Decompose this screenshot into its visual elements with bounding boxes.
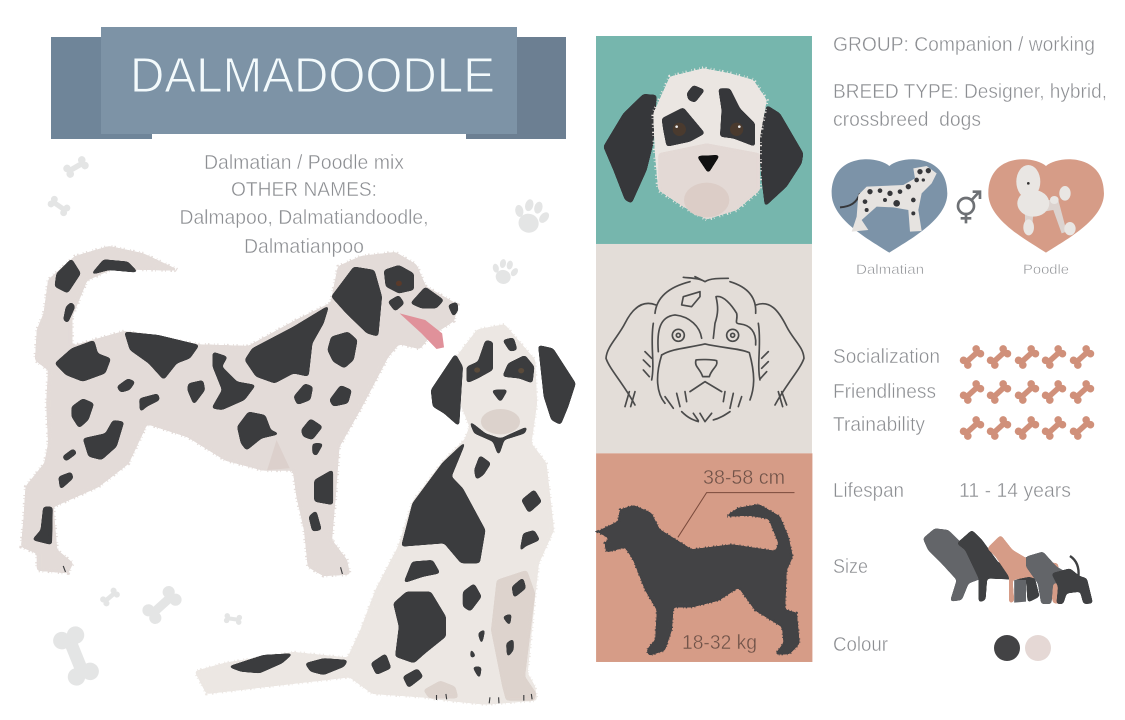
text block: other names: Dalmatianpoo [244,236,364,258]
size comparison dogs [923,528,1093,604]
group and breed text: BREED TYPE: Designer, hybrid, [833,81,1107,103]
standing dog illustration [22,247,458,575]
rating labels: Socialization [833,346,940,368]
dog face colour [603,68,803,219]
dog spots [32,258,458,545]
lifespan: Lifespan [833,480,904,502]
panel: silhouette size and weight [596,453,812,662]
icon: gender symbol [958,192,980,223]
rating bones [958,344,1096,441]
lifespan [833,480,1071,502]
lifespan: 11 - 14 years [959,480,1071,502]
icon: Dalmatian heart [832,159,947,253]
panel: colour face portrait [596,36,812,244]
label: Poodle: Poodle [1023,261,1069,277]
group and breed text: crossbreed dogs [833,109,981,131]
height pointer [678,493,794,537]
background bones and paws [46,155,554,688]
dog silhouette [598,505,799,655]
dog spots [228,337,576,688]
size label: Size [833,556,868,578]
title: DALMADOODLE [130,49,495,103]
group and breed text: GROUP: Companion / working [833,34,1095,56]
icon: Poodle heart [988,159,1104,253]
panel: line art face [596,244,812,453]
sitting dog illustration [196,325,576,704]
text block: other names: OTHER NAMES: [231,179,377,201]
text block: other names: Dalmatian / Poodle mix [204,152,404,174]
label: Dalmatian: Dalmatian [856,261,924,277]
weight label: 18-32 kg [682,632,757,654]
ratings [833,344,1096,441]
group and breed text [833,34,1107,131]
colour swatches [994,635,1051,661]
title banner [51,27,566,139]
colour label: Colour [833,634,888,656]
text block: other names [180,152,428,258]
rating labels: Friendliness [833,381,936,403]
height label: 38-58 cm [703,467,785,489]
rating labels: Trainability [833,414,925,436]
dog face outline [606,277,804,422]
text block: other names: Dalmapoo, Dalmatiandoodle, [180,207,428,229]
tongue [400,313,444,349]
rating labels [833,346,940,436]
